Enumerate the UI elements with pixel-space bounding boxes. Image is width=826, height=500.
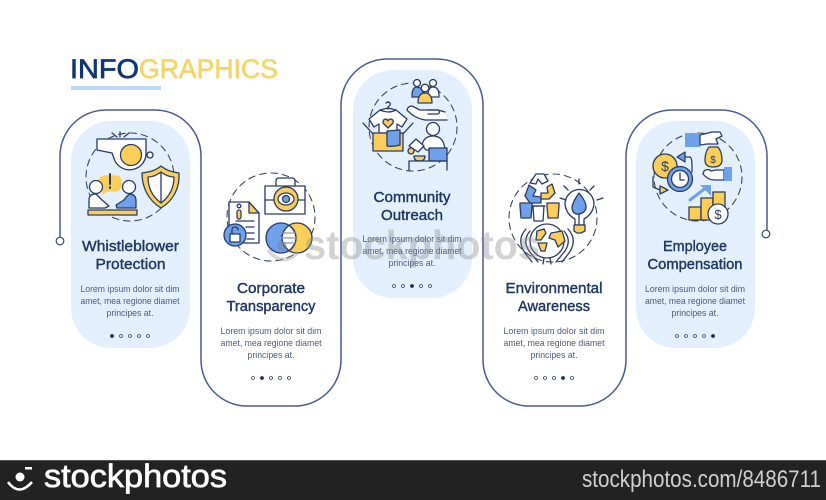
panel: corporate transparency: Transparency [226, 298, 316, 315]
heading: Employee [663, 238, 727, 255]
body text: amet, mea regione diamet [645, 295, 745, 306]
icon: whistle, people and shield [86, 132, 179, 221]
pagination dots [534, 376, 574, 380]
body text: amet, mea regione diamet [220, 337, 322, 348]
title [70, 54, 278, 90]
icon: money bag, clock, coins and chart: $ [710, 155, 716, 166]
panel: employee compensation [636, 121, 755, 348]
body text: Lorem ipsum dolor sit dim [504, 325, 605, 336]
panel: environmental awareness: Awareness [518, 298, 590, 315]
body text: Lorem ipsum dolor sit dim [645, 283, 745, 294]
icon: briefcase eye, document and venn [224, 173, 315, 261]
body text: Lorem ipsum dolor sit dim [362, 233, 462, 244]
body text: principes at. [106, 307, 154, 318]
panel: whistleblower protection: Protection [96, 256, 166, 273]
body text [220, 325, 322, 360]
body text [645, 283, 745, 318]
heading: Whistleblower [82, 238, 179, 255]
icon: money bag, clock, coins and chart: $ [714, 207, 722, 222]
body text: principes at. [388, 257, 436, 268]
body text: Lorem ipsum dolor sit dim [80, 283, 180, 294]
body text: principes at. [672, 307, 718, 318]
icon: donation, people and cooking [363, 80, 457, 171]
panel: corporate transparency [220, 173, 322, 380]
icon: money bag, clock, coins and chart [653, 132, 742, 224]
body text: Lorem ipsum dolor sit dim [220, 325, 322, 336]
body text [504, 325, 605, 360]
panel: employee compensation: Compensation [648, 256, 742, 273]
pagination dots [392, 284, 432, 288]
body text: principes at. [248, 349, 294, 360]
icon: footer logo [8, 467, 32, 490]
pagination dots [676, 334, 714, 338]
body text: amet, mea regione diamet [80, 295, 180, 306]
icon: recycling, cups, bulb and globe [509, 174, 603, 264]
heading: Environmental [506, 280, 602, 297]
panel: whistleblower protection [71, 121, 190, 348]
body text: amet, mea regione diamet [362, 245, 462, 256]
body text [362, 233, 462, 268]
pagination dots [252, 376, 290, 380]
panel: community outreach: Outreach [381, 207, 443, 224]
connector outline [56, 59, 770, 406]
heading: Corporate [237, 280, 305, 297]
panel: community outreach [353, 70, 472, 298]
body text [80, 283, 180, 318]
icon: money bag, clock, coins and chart: $ [661, 158, 669, 174]
title: GRAPHICS [139, 54, 278, 84]
title: INFO [70, 54, 139, 84]
footer logo wordmark: stockphotos [44, 458, 227, 494]
body text: amet, mea regione diamet [504, 337, 605, 348]
panel: environmental awareness [504, 174, 605, 380]
footer bar [0, 458, 826, 500]
watermark: stockphotos [304, 222, 540, 268]
body text: principes at. [530, 349, 578, 360]
heading: Community [374, 189, 451, 206]
pagination dots [110, 334, 150, 338]
